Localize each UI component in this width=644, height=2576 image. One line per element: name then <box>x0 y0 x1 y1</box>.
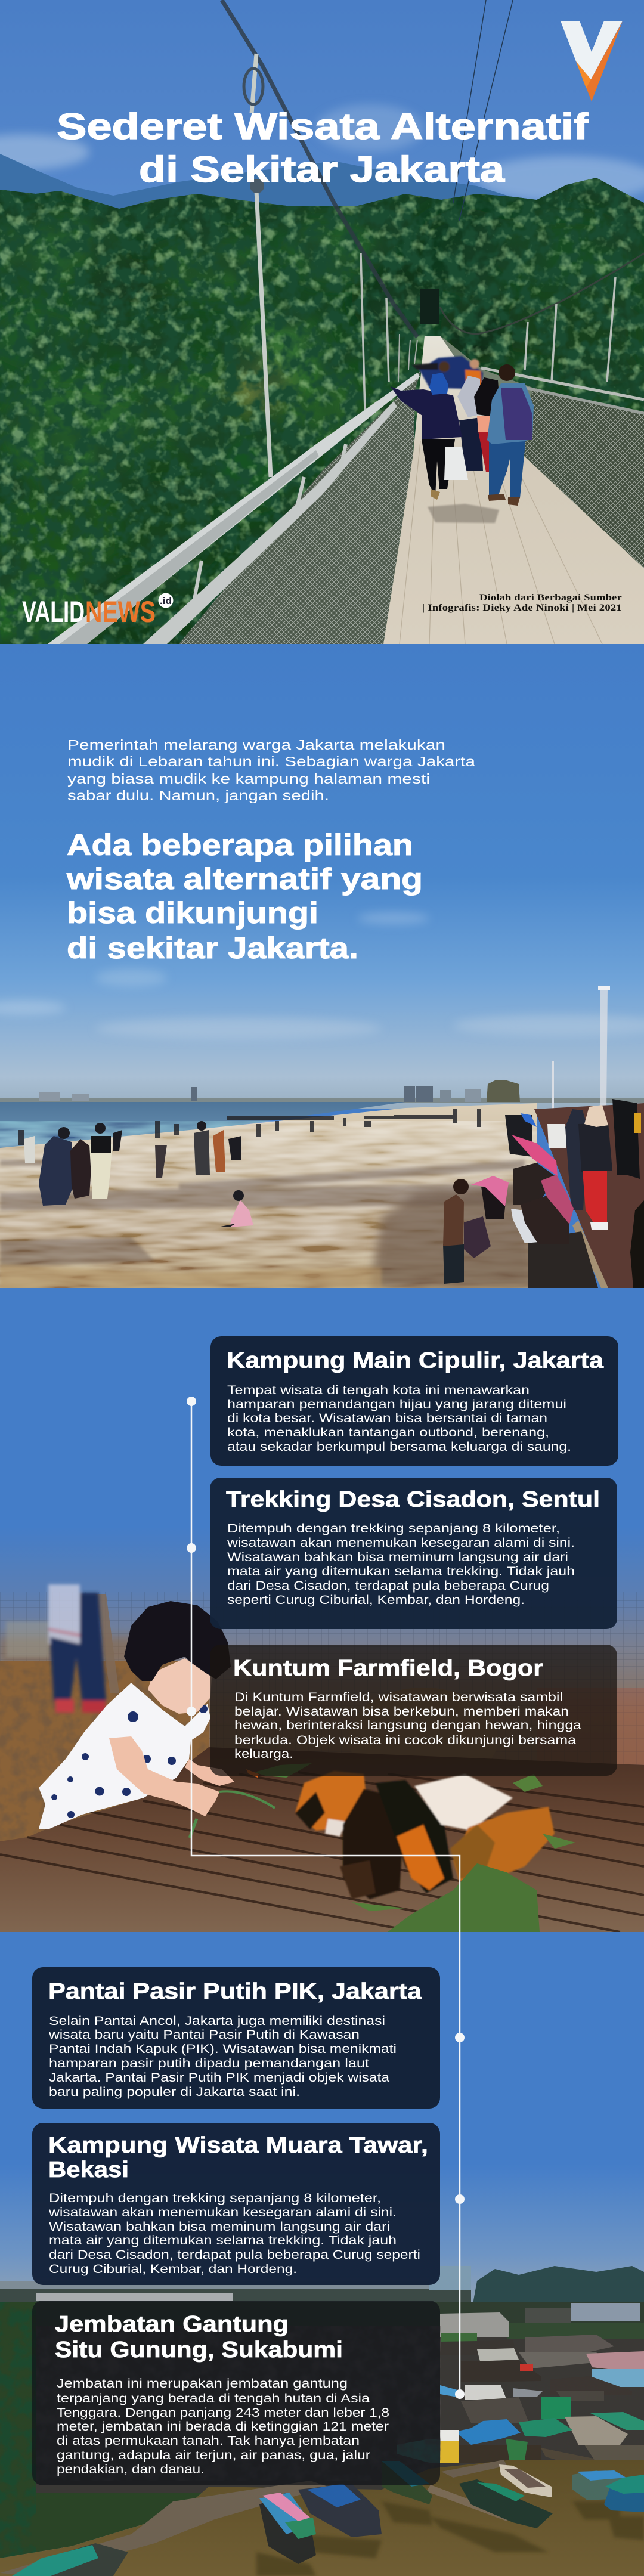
title: Sederet Wisata Alternatif <box>57 106 589 147</box>
background child <box>48 1584 106 1713</box>
heading: alternative options: Ada beberapa pilihan <box>67 828 413 862</box>
card: Trekking Desa Cisadon: seperti Curug Ciburial, Kembar, dan Hordeng. <box>227 1593 525 1607</box>
logo: V mark <box>561 21 623 101</box>
heading: alternative options <box>66 828 423 965</box>
card: Trekking Desa Cisadon: wisatawan akan menemukan kesegaran alami di sini. <box>227 1536 575 1550</box>
bridge deck <box>383 336 644 644</box>
card: Kampung Wisata Muara Tawar: Curug Ciburial, Kembar, dan Hordeng. <box>49 2262 297 2276</box>
card: Pantai Pasir Putih PIK: Selain Pantai Ancol, Jakarta juga memiliki destinasi <box>49 2014 385 2028</box>
card: Jembatan Gantung Situ Gunung: terpanjang yang berada di tengah hutan di Asia <box>57 2392 370 2405</box>
guinea pigs <box>295 1771 555 1899</box>
promenade <box>534 1103 644 1288</box>
panel: fishing village photo section <box>0 1932 644 2576</box>
panel: farm photo section <box>0 1288 644 1932</box>
card: Kampung Wisata Muara Tawar: Kampung Wisata Muara Tawar, <box>48 2133 428 2158</box>
card: Jembatan Gantung Situ Gunung <box>32 2301 440 2485</box>
card: Kampung Wisata Muara Tawar: wisatawan akan menemukan kesegaran alami di sini. <box>48 2206 397 2219</box>
credits: | Infografis: Dieky Ade Ninoki | Mei 2021 <box>422 603 622 613</box>
mangrove trees <box>0 2302 209 2558</box>
intro text: mudik di Lebaran tahun ini. Sebagian warga Jakarta <box>67 754 475 769</box>
card: Trekking Desa Cisadon: mata air yang ditemukan selama trekking. Tidak jauh <box>227 1565 575 1578</box>
card: Trekking Desa Cisadon <box>210 1478 617 1629</box>
girl in polka dot dress <box>39 1601 234 1829</box>
card: Jembatan Gantung Situ Gunung: pendakian, dan danau. <box>57 2463 205 2476</box>
card: Jembatan Gantung Situ Gunung: Tenggara. Dengan panjang 243 meter dan leber 1,8 <box>57 2406 389 2420</box>
card: Pantai Pasir Putih PIK: Pantai Pasir Putih PIK, Jakarta <box>48 1979 422 2004</box>
intro text: sabar dulu. Namun, jangan sedih. <box>67 788 329 803</box>
heading: alternative options: wisata alternatif yang <box>66 862 423 896</box>
person: child with red pants <box>474 377 508 472</box>
distant trees and factories <box>471 2266 644 2326</box>
shadows on sand <box>0 1160 525 1267</box>
title: di Sekitar Jakarta <box>139 149 505 190</box>
basket <box>349 1688 498 1789</box>
card: Trekking Desa Cisadon: Ditempuh dengan trekking sepanjang 8 kilometer, <box>227 1522 560 1535</box>
person: grey hijab woman <box>457 376 483 471</box>
far beach visitors <box>18 1109 481 1145</box>
card: Trekking Desa Cisadon: dari Desa Cisadon, terdapat pula beberapa Curug <box>227 1579 549 1593</box>
water reflections <box>256 2501 644 2576</box>
card: Kuntum Farmfield: Di Kuntum Farmfield, wisatawan berwisata sambil <box>234 1690 563 1704</box>
card: Kampung Wisata Muara Tawar <box>32 2123 440 2285</box>
card: Kampung Main Cipulir: Tempat wisata di tengah kota ini menawarkan <box>227 1383 530 1397</box>
right netting <box>523 388 644 568</box>
credits <box>422 593 622 613</box>
panel: beach photo section <box>0 739 644 1288</box>
card: Kampung Main Cipulir: hamparan pemandangan hijau yang jarang ditemui <box>227 1398 566 1411</box>
card: Kampung Wisata Muara Tawar: mata air yang ditemukan selama trekking. Tidak jauh <box>49 2234 397 2247</box>
card: Kuntum Farmfield: keluarga. <box>234 1747 293 1761</box>
card: Kuntum Farmfield: hewan, berinteraksi langsung dengan hewan, hingga <box>234 1719 581 1732</box>
logo: Validnews: VALID <box>22 595 85 628</box>
card: Pantai Pasir Putih PIK <box>32 1967 440 2109</box>
card: Jembatan Gantung Situ Gunung: Situ Gunung, Sukabumi <box>55 2337 343 2363</box>
card: Kuntum Farmfield <box>210 1645 617 1776</box>
card: Jembatan Gantung Situ Gunung: gantung, adapula air terjun, air panas, gua, jalur <box>57 2448 370 2462</box>
card: Kampung Main Cipulir: Kampung Main Cipulir, Jakarta <box>227 1348 604 1373</box>
card: Pantai Pasir Putih PIK: Pantai Indah Kapuk (PIK). Wisatawan bisa menikmati <box>49 2042 397 2056</box>
credits: Diolah dari Berbagai Sumber <box>479 593 622 603</box>
card: Trekking Desa Cisadon: Trekking Desa Cisadon, Sentul <box>226 1487 600 1512</box>
intro text: yang biasa mudik ke kampung halaman mesti <box>67 771 430 787</box>
card: Kampung Wisata Muara Tawar: Bekasi <box>48 2157 129 2182</box>
city skyline <box>39 1080 520 1102</box>
person: man with backpack <box>487 364 534 506</box>
card: Kampung Main Cipulir: kota, menaklukan tantangan outbond, berenang, <box>227 1426 549 1439</box>
card: Kampung Main Cipulir: di kota besar. Wisatawan bisa bersantai di taman <box>227 1411 547 1425</box>
card: Kampung Main Cipulir: atau sekadar berkumpul bersama keluarga di saung. <box>227 1440 571 1454</box>
left crowd <box>24 1121 253 1227</box>
card: Trekking Desa Cisadon: Wisatawan bahkan bisa meminum langsung air dari <box>227 1550 568 1564</box>
card: Kuntum Farmfield: belajar. Wisatawan bisa berkebun, memberi makan <box>234 1705 569 1719</box>
intro text: Pemerintah melarang warga Jakarta melakukan <box>67 737 445 753</box>
card: Pantai Pasir Putih PIK: hamparan pasir putih dipadu pemandangan laut <box>49 2057 369 2070</box>
light tower <box>552 986 610 1109</box>
village roofs <box>36 2303 644 2493</box>
timeline connector with dots <box>187 1397 465 2399</box>
card: Pantai Pasir Putih PIK: wisata baru yaitu Pantai Pasir Putih di Kawasan <box>48 2028 360 2042</box>
leaves and carrot <box>190 1763 575 1932</box>
left netting <box>179 370 422 644</box>
river water <box>0 2460 644 2576</box>
card: Jembatan Gantung Situ Gunung: Jembatan ini merupakan jembatan gantung <box>57 2377 348 2391</box>
card: Kampung Wisata Muara Tawar: Ditempuh dengan trekking sepanjang 8 kilometer, <box>49 2191 381 2205</box>
wooden boats <box>12 2461 644 2576</box>
intro text <box>67 737 475 803</box>
wooden table <box>0 1747 644 1932</box>
panel: hero suspension bridge photo <box>0 0 644 650</box>
heading: alternative options: bisa dikunjungi <box>67 896 318 930</box>
card: Kampung Main Cipulir <box>210 1336 618 1466</box>
card: Kuntum Farmfield: Kuntum Farmfield, Bogor <box>233 1656 543 1681</box>
logo: Validnews <box>22 593 173 623</box>
card: Kampung Wisata Muara Tawar: Wisatawan bahkan bisa meminum langsung air dari <box>49 2220 390 2234</box>
deck shadow <box>428 504 499 523</box>
card: Kuntum Farmfield: berkuda. Objek wisata ini cocok dikunjungi bersama <box>234 1733 576 1747</box>
person: group at back <box>411 356 483 391</box>
piers <box>0 2460 511 2576</box>
card: Kampung Wisata Muara Tawar: dari Desa Cisadon, terdapat pula beberapa Curug seperti <box>49 2248 420 2262</box>
person: woman in navy jacket <box>391 373 468 500</box>
right crowd with umbrella <box>443 1099 644 1288</box>
logo: Validnews: NEWS <box>85 595 156 628</box>
card: Jembatan Gantung Situ Gunung: Jembatan Gantung <box>55 2312 289 2337</box>
main suspension cable <box>222 0 417 337</box>
sandy beach <box>0 1103 537 1288</box>
card: Pantai Pasir Putih PIK: baru paling populer di Jakarta saat ini. <box>49 2085 300 2099</box>
left handrail <box>48 373 420 644</box>
card: Jembatan Gantung Situ Gunung: meter, jembatan ini berada di ketinggian 121 meter <box>57 2420 389 2433</box>
title <box>57 112 589 182</box>
card: Pantai Pasir Putih PIK: Jakarta. Pantai Pasir Putih PIK menjadi objek wisata <box>49 2071 389 2085</box>
logo: Validnews: .id <box>160 596 172 606</box>
card: Jembatan Gantung Situ Gunung: di atas permukaan tanah. Tak hanya jembatan <box>57 2434 360 2448</box>
heading: alternative options: di sekitar Jakarta. <box>67 931 358 965</box>
